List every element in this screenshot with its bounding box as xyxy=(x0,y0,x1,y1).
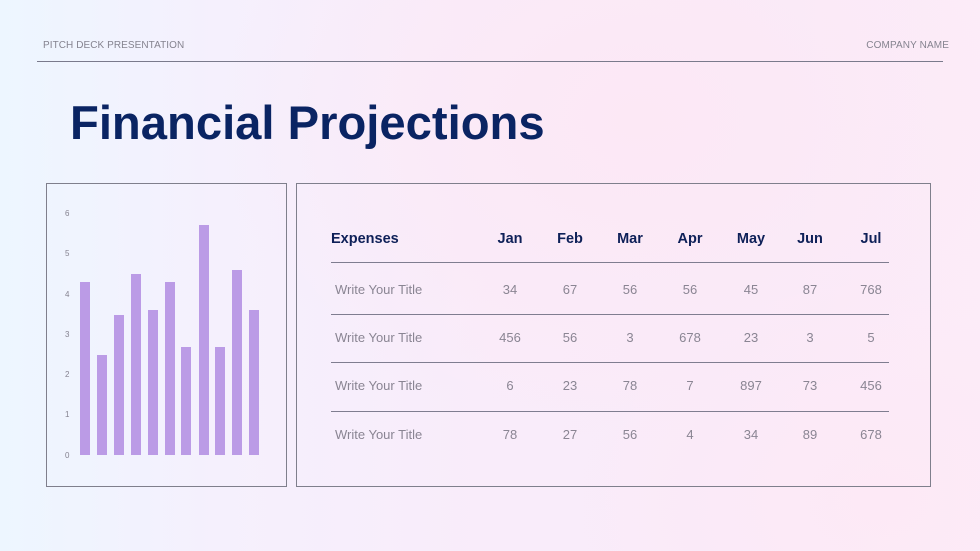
table row 4: 89 xyxy=(803,427,817,442)
table row 1: 67 xyxy=(563,282,577,297)
table row 3: 23 xyxy=(563,378,577,393)
table row 1: 45 xyxy=(744,282,758,297)
bar chart: 2 xyxy=(65,370,69,379)
bar chart: 6 xyxy=(65,209,69,218)
bar chart: 1 xyxy=(65,410,69,419)
table row 3: 73 xyxy=(803,378,817,393)
table row 4: 34 xyxy=(744,427,758,442)
table row 1: 87 xyxy=(803,282,817,297)
table row 3: 7 xyxy=(686,378,694,393)
header label: pitch deck presentation: PITCH DECK PRESENTATION xyxy=(43,40,184,51)
header rule xyxy=(37,61,943,62)
table row 3: 78 xyxy=(623,378,637,393)
table row 3: 6 xyxy=(506,378,514,393)
table row 1 xyxy=(335,282,882,297)
header label: company name: COMPANY NAME xyxy=(866,40,949,51)
bar chart xyxy=(65,209,259,460)
table row 3: Write Your Title xyxy=(335,378,422,393)
table row 2: Write Your Title xyxy=(335,330,422,345)
table row 4: 4 xyxy=(686,427,694,442)
table row 4: 678 xyxy=(860,427,882,442)
table row 4 xyxy=(335,427,882,442)
table row 2: 5 xyxy=(867,330,875,345)
table row 2 xyxy=(335,330,875,345)
table row 2: 56 xyxy=(563,330,577,345)
table row 2: 23 xyxy=(744,330,758,345)
table row 1: Write Your Title xyxy=(335,282,422,297)
table header row xyxy=(331,231,881,247)
table header row: Jun xyxy=(797,231,823,247)
bar chart: 3 xyxy=(65,330,69,339)
table row 1: 56 xyxy=(623,282,637,297)
table row 4: 27 xyxy=(563,427,577,442)
table row 3: 897 xyxy=(740,378,762,393)
table header row: Apr xyxy=(678,231,702,247)
table row 3: 456 xyxy=(860,378,882,393)
table row 2: 3 xyxy=(626,330,634,345)
table row 4: 56 xyxy=(623,427,637,442)
table header row: Jul xyxy=(861,231,881,247)
table header row: Jan xyxy=(498,231,522,247)
table row 1: 768 xyxy=(860,282,882,297)
title: Financial Projections xyxy=(70,96,545,150)
bar chart: 0 xyxy=(65,451,69,460)
table header row: Feb xyxy=(557,231,583,247)
table row 4: 78 xyxy=(503,427,517,442)
table header row: Expenses xyxy=(331,231,399,247)
table row 1: 34 xyxy=(503,282,517,297)
table header row: May xyxy=(737,231,765,247)
table row 4: Write Your Title xyxy=(335,427,422,442)
table header row: Mar xyxy=(617,231,643,247)
table row 2: 3 xyxy=(806,330,814,345)
panel: expenses table xyxy=(296,183,931,487)
table row 3 xyxy=(335,378,882,393)
table row 1: 56 xyxy=(683,282,697,297)
bar chart: 5 xyxy=(65,249,69,258)
bar chart: 4 xyxy=(65,290,69,299)
table row 2: 456 xyxy=(499,330,521,345)
panel: bar chart xyxy=(46,183,287,487)
table row 2: 678 xyxy=(679,330,701,345)
